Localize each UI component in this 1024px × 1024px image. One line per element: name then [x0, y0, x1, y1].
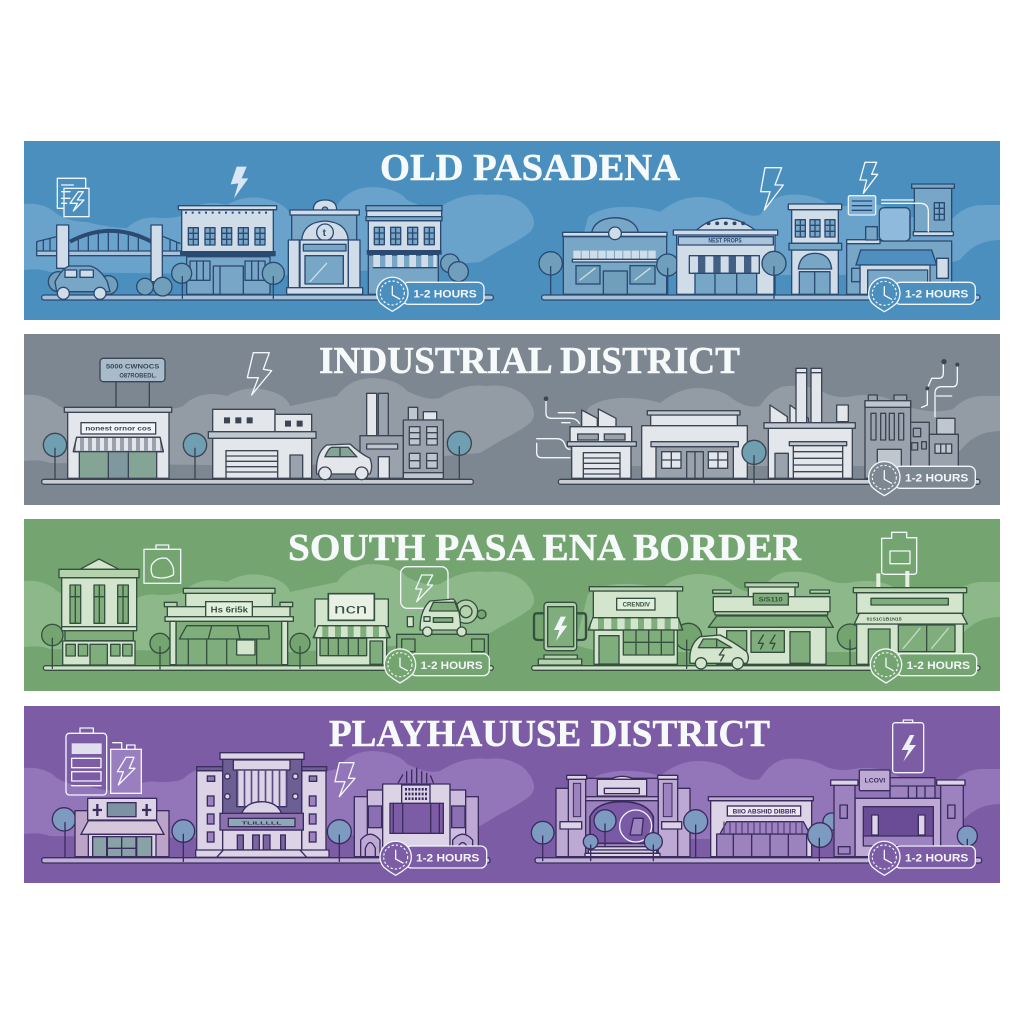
panel: Industrial District — [24, 334, 1000, 505]
scene: South Pasadena left streetscape — [42, 545, 493, 683]
icon: battery card — [57, 178, 89, 217]
bushes — [137, 277, 172, 296]
ground — [542, 295, 980, 300]
badge: 1-2 hours: 1-2 HOURS — [905, 289, 969, 301]
badge: 1-2 hours — [377, 277, 484, 311]
icon: bolts — [761, 162, 878, 210]
building: clinic shop — [75, 798, 169, 857]
wires — [537, 396, 579, 458]
icon: charger screen — [401, 567, 448, 608]
car with bushes — [48, 266, 118, 299]
trees — [583, 810, 662, 861]
building: wide warehouse — [642, 411, 747, 478]
icon: bolt — [335, 763, 355, 797]
title: Industrial District: INDUSTRIAL DISTRICT — [319, 340, 740, 382]
badge: 1-2 hours — [869, 278, 975, 312]
tree — [172, 820, 195, 861]
badge: 1-2 hours: 1-2 HOURS — [413, 289, 477, 301]
panel: Old Pasadena — [24, 141, 1000, 320]
building: shop with roof battery: 01S1C1B1N15 — [867, 617, 902, 622]
scene: Industrial left streetscape — [42, 353, 473, 484]
building: shop with roof battery — [853, 532, 967, 664]
badge: 1-2 hours — [870, 649, 977, 683]
building: domed clock hall — [287, 200, 363, 294]
title: Playhauuse District: PLAYHAUUSE DISTRICT — [329, 713, 770, 755]
icon: bolt — [247, 353, 272, 395]
building: charging depot with car — [397, 599, 488, 664]
building: factory with chimneys — [360, 393, 443, 479]
building: factory with chimneys and garage — [764, 368, 855, 478]
car — [690, 635, 748, 669]
badge: 1-2 hours — [869, 841, 975, 875]
tree — [657, 254, 679, 294]
badge: 1-2 hours: 1-2 HOURS — [907, 660, 970, 672]
tree — [42, 624, 63, 668]
ground — [42, 479, 473, 484]
building: striped awning shop: CRENDIV — [623, 602, 650, 608]
building: shop with three awnings — [164, 588, 293, 665]
panel: Playhouse District — [24, 706, 1000, 883]
building: grand theatre — [196, 753, 329, 857]
building: marquee hall — [831, 770, 965, 857]
tree — [684, 810, 708, 857]
ground — [42, 295, 493, 300]
building: dome-roof shop — [673, 218, 778, 294]
building: bolt-window shop: S/S110 — [759, 598, 783, 604]
icon: battery with bolt — [893, 720, 924, 773]
building: sign shop: ncn — [334, 600, 367, 616]
badge: 1-2 hours — [869, 462, 975, 496]
building: shop with billboard: nonest ornor cos — [85, 427, 152, 433]
scene: Old Pasadena left streetscape — [37, 167, 493, 311]
ground — [558, 479, 980, 484]
icon: batteries — [66, 728, 141, 795]
building: striped awning shop: BIIO ABSHID DIBBIR — [733, 809, 797, 815]
tree — [742, 440, 766, 483]
panel: South Pasadena Border — [24, 519, 1000, 691]
tree — [150, 633, 170, 669]
car — [316, 444, 372, 480]
wires — [922, 359, 959, 417]
building: striped awning shop — [588, 587, 683, 664]
tree — [447, 431, 471, 478]
bridge — [37, 225, 181, 282]
building: ornate theatre — [556, 775, 690, 857]
badge: 1-2 hours: 1-2 HOURS — [905, 853, 969, 865]
title: Old Pasadena: OLD PASADENA — [380, 147, 681, 189]
ground — [43, 666, 493, 670]
icon: case — [144, 545, 181, 583]
building: narrow arched tower — [788, 204, 842, 294]
building: shop with billboard: O87ROBEDL. — [119, 373, 157, 379]
building: bolt-window shop — [708, 583, 833, 664]
icon: lightning bolt — [231, 167, 248, 198]
badge: 1-2 hours: 1-2 HOURS — [421, 660, 483, 672]
building: saw-tooth garage — [567, 409, 636, 478]
tree — [762, 251, 786, 298]
tree — [327, 820, 351, 861]
title: South Pasa Ena Border: SOUTH PASA ENA BORDER — [288, 527, 802, 569]
tree — [172, 263, 192, 298]
trees — [441, 254, 468, 282]
building: marquee hall: LCOVI — [865, 779, 886, 785]
tree — [539, 252, 562, 294]
ground — [532, 666, 980, 670]
ground — [42, 858, 490, 863]
icon: big charger — [534, 602, 586, 665]
building: two-storey shop — [178, 206, 277, 294]
ground — [535, 858, 982, 863]
tree — [531, 821, 554, 861]
scene: Playhouse left streetscape — [42, 728, 490, 875]
building: shop with three awnings: Hs 6ri5k — [211, 605, 249, 614]
scene: South Pasadena right streetscape — [532, 532, 980, 683]
building: garage — [208, 409, 316, 478]
badge: 1-2 hours: 1-2 HOURS — [416, 853, 480, 865]
building: dome-roof shop: NEST PROPS — [708, 239, 742, 245]
tree — [43, 433, 67, 478]
tree — [52, 808, 76, 857]
scene: Industrial right streetscape — [537, 359, 980, 496]
tree — [837, 624, 863, 666]
building: rooftop power building — [847, 184, 954, 294]
badge: 1-2 hours — [384, 649, 489, 683]
building: shop with billboard: 5000 CWNOCS — [106, 365, 159, 371]
building: sign shop — [313, 594, 390, 665]
tree — [290, 633, 310, 668]
building: arched storefront — [563, 218, 667, 294]
badge: 1-2 hours: 1-2 HOURS — [905, 473, 969, 485]
building: grand theatre: TLILLLLL — [242, 820, 282, 825]
badge: 1-2 hours — [380, 841, 487, 875]
building: office block and annex — [865, 395, 958, 478]
building: pediment building — [59, 559, 139, 665]
tree — [957, 826, 977, 857]
building: art deco theatre — [354, 768, 478, 857]
tree — [262, 262, 284, 298]
tree — [808, 813, 840, 861]
scene: Playhouse right streetscape — [531, 720, 982, 875]
scene: Old Pasadena right streetscape — [539, 162, 980, 312]
building: shop with striped awning — [366, 206, 442, 294]
tree — [675, 623, 702, 668]
building: domed clock hall: t — [323, 228, 327, 239]
building: striped awning shop — [708, 797, 813, 857]
building: shop with billboard — [64, 358, 172, 478]
tree — [183, 433, 207, 478]
